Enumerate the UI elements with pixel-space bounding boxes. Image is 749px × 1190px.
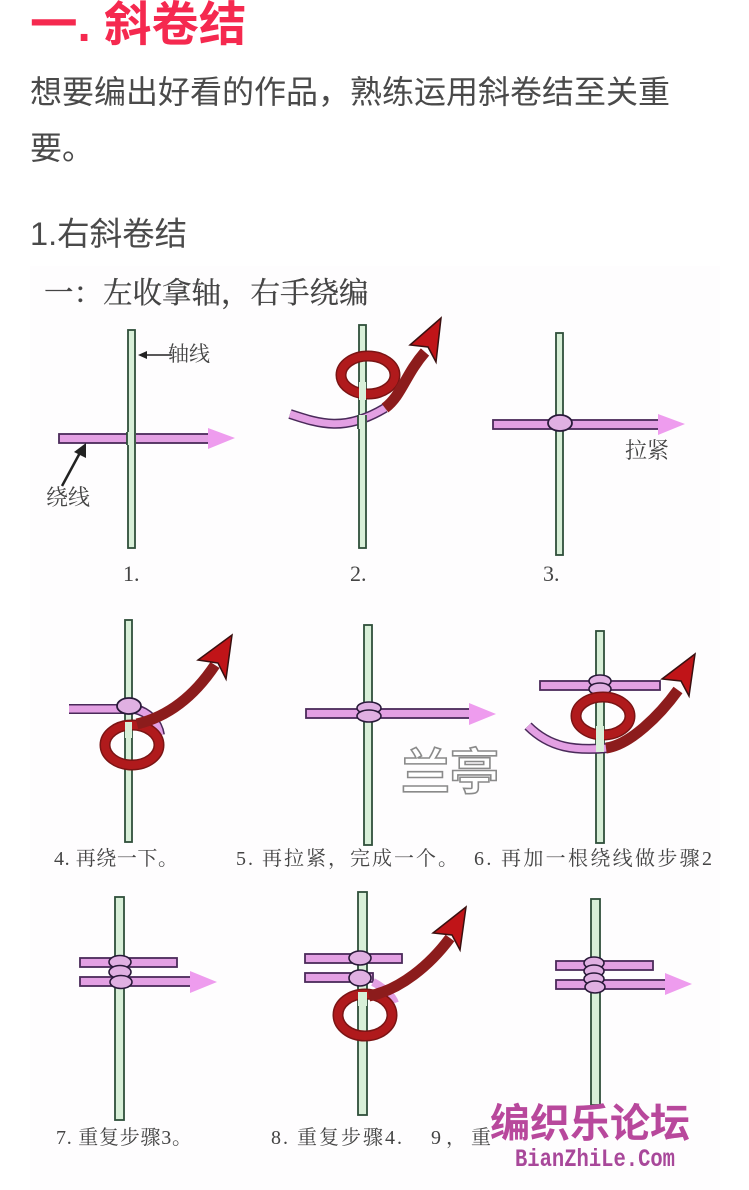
watermark: 编织乐论坛: BianZhiLe.Com — [515, 1145, 675, 1174]
step 8 — [305, 892, 466, 1115]
step 2 — [290, 318, 441, 586]
captions row 2: 5. 再拉紧，完成一个。 — [236, 847, 458, 870]
step 4 — [69, 620, 232, 842]
step 1: 绕线 — [46, 485, 90, 510]
step 1: 1. — [123, 561, 140, 586]
captions row 3: 9，重 — [431, 1126, 491, 1149]
step 5 — [306, 625, 496, 845]
step 7 — [80, 897, 217, 1120]
title: 一. 斜卷结 — [30, 0, 246, 52]
watermark: 编织乐论坛: 编织乐论坛 — [490, 1102, 690, 1146]
step 6 — [528, 631, 695, 843]
captions row 3: 7. 重复步骤3。 — [56, 1126, 192, 1149]
step 3: 拉紧 — [625, 438, 669, 463]
step 1 — [46, 330, 235, 586]
watermark: 兰亭: 兰亭 — [401, 746, 499, 800]
captions row 3 — [56, 1126, 491, 1149]
step 2: 2. — [350, 561, 366, 586]
intro text — [30, 74, 670, 166]
step 3 — [493, 333, 685, 586]
captions row 2 — [54, 847, 712, 870]
section heading: 1.右斜卷结 — [30, 216, 187, 252]
intro text: 要。 — [30, 130, 94, 166]
step 3: 3. — [543, 561, 560, 586]
step 1: 轴线 — [168, 342, 210, 366]
captions row 2: 4. 再绕一下。 — [54, 847, 178, 870]
captions row 3: 8. 重复步骤4. — [271, 1126, 402, 1149]
intro text: 想要编出好看的作品，熟练运用斜卷结至关重 — [30, 74, 670, 110]
captions row 2: 6. 再加一根绕线做步骤2 — [474, 847, 712, 870]
diagram heading: 一：左收拿轴，右手绕编 — [44, 277, 369, 310]
step 9 — [556, 899, 692, 1105]
watermark: 编织乐论坛 — [490, 1102, 690, 1174]
